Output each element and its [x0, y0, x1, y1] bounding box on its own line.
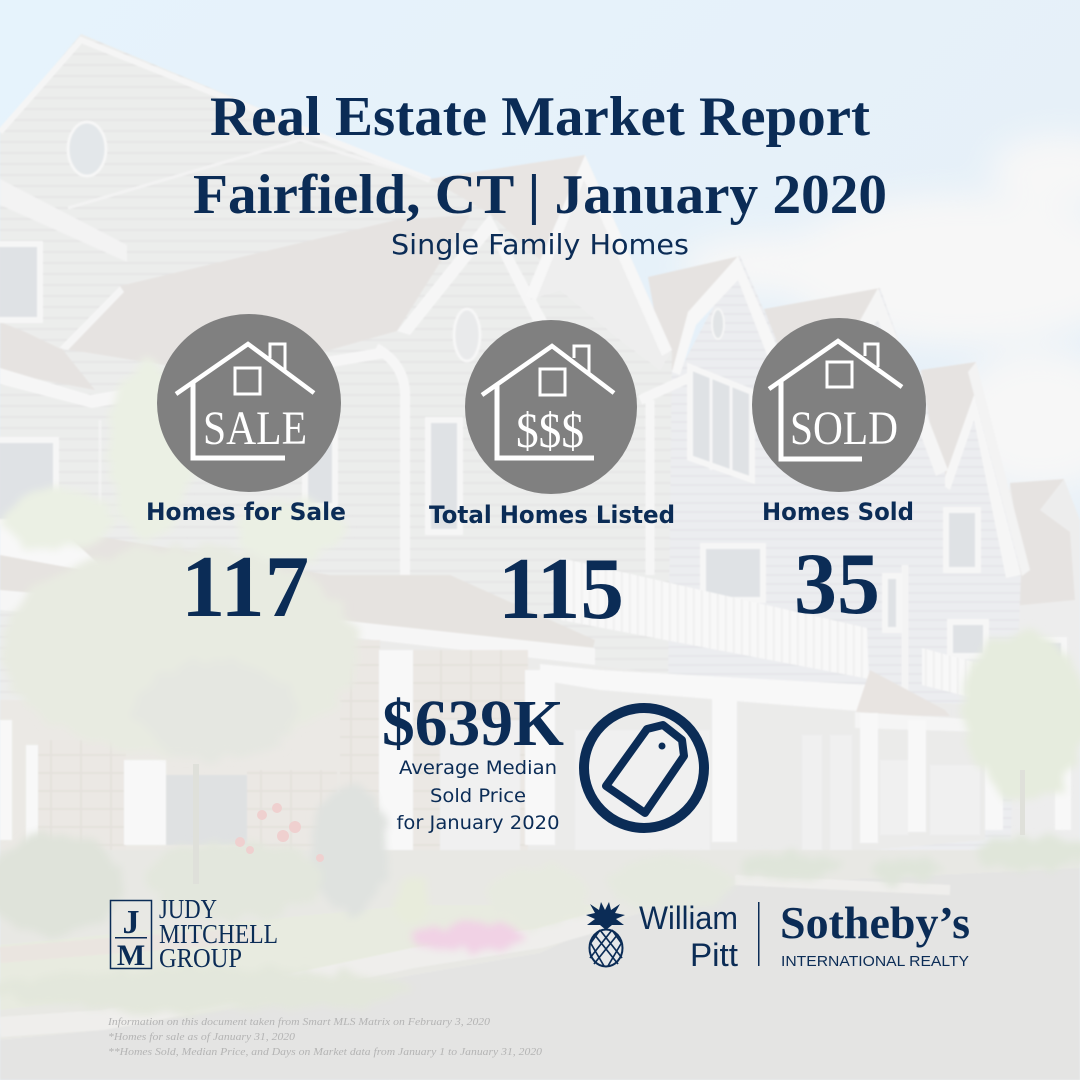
label: Total Homes Listed	[429, 501, 675, 529]
far right wing	[990, 479, 1080, 850]
icon: dollars house	[465, 320, 637, 494]
footnotes: *Homes for sale as of January 31, 2020	[108, 1031, 296, 1043]
label: Homes for Sale	[146, 498, 346, 526]
price: $639K	[382, 687, 564, 760]
icon: sale house: SALE	[203, 402, 307, 455]
logo: Judy Mitchell Group: M	[117, 939, 145, 972]
footnotes: **Homes Sold, Median Price, and Days on Market data from January 1 to January 31, 2020	[108, 1046, 543, 1058]
ground	[0, 850, 1080, 1080]
balcony	[561, 558, 869, 679]
icon: dollars house: $$$	[516, 402, 584, 458]
icon: price tag	[584, 708, 704, 828]
title	[193, 86, 887, 226]
median price block	[382, 687, 704, 834]
logo: William Pitt Sotheby's: INTERNATIONAL REALTY	[781, 953, 969, 970]
rect windows	[0, 244, 1064, 670]
icon: sold house	[752, 318, 926, 492]
stat: homes sold	[752, 318, 926, 633]
logo: Judy Mitchell Group: GROUP	[159, 943, 242, 973]
price caption: for January 2020	[396, 812, 560, 834]
icon: sale house	[157, 314, 341, 492]
logo: Judy Mitchell Group: JUDY	[159, 894, 217, 924]
label: Homes Sold	[762, 498, 914, 526]
porch columns	[0, 650, 1071, 850]
logo: Judy Mitchell Group	[110, 894, 278, 973]
stat: total homes listed	[429, 320, 675, 638]
logo: Judy Mitchell Group: J	[122, 904, 140, 941]
logo: William Pitt Sotheby's: Sotheby’s	[780, 897, 970, 948]
porch doors	[440, 720, 980, 850]
icon: sold house: SOLD	[790, 402, 898, 455]
logo: William Pitt Sotheby's: William	[639, 900, 738, 936]
title: Real Estate Market Report	[210, 86, 870, 148]
footnotes	[107, 1016, 543, 1058]
third section	[660, 256, 945, 860]
price caption: Average Median	[399, 757, 557, 779]
foliage	[0, 360, 1080, 1012]
title: Fairfield, CT | January 2020	[193, 164, 887, 226]
logo: William Pitt Sotheby's	[586, 897, 970, 973]
central gables	[380, 214, 660, 700]
stat: homes for sale	[146, 314, 346, 636]
porch roof	[0, 530, 595, 660]
round windows	[68, 122, 106, 176]
porch ceiling and lintel	[330, 635, 985, 860]
left main body	[0, 34, 760, 880]
logo: Judy Mitchell Group: MITCHELL	[159, 919, 278, 949]
number: 35	[794, 536, 880, 633]
footnotes: Information on this document taken from Smart MLS Matrix on February 3, 2020	[107, 1016, 491, 1028]
logo: William Pitt Sotheby's: Pitt	[690, 937, 738, 973]
price caption	[396, 757, 560, 834]
gutter and pipes	[376, 348, 405, 578]
number: 117	[181, 539, 309, 636]
fourth gable	[880, 362, 1021, 860]
number: 115	[498, 541, 624, 638]
left gable trim	[0, 40, 430, 180]
price caption: Sold Price	[430, 785, 526, 807]
subtitle: Single Family Homes	[391, 228, 689, 261]
icon: pineapple	[586, 902, 625, 966]
